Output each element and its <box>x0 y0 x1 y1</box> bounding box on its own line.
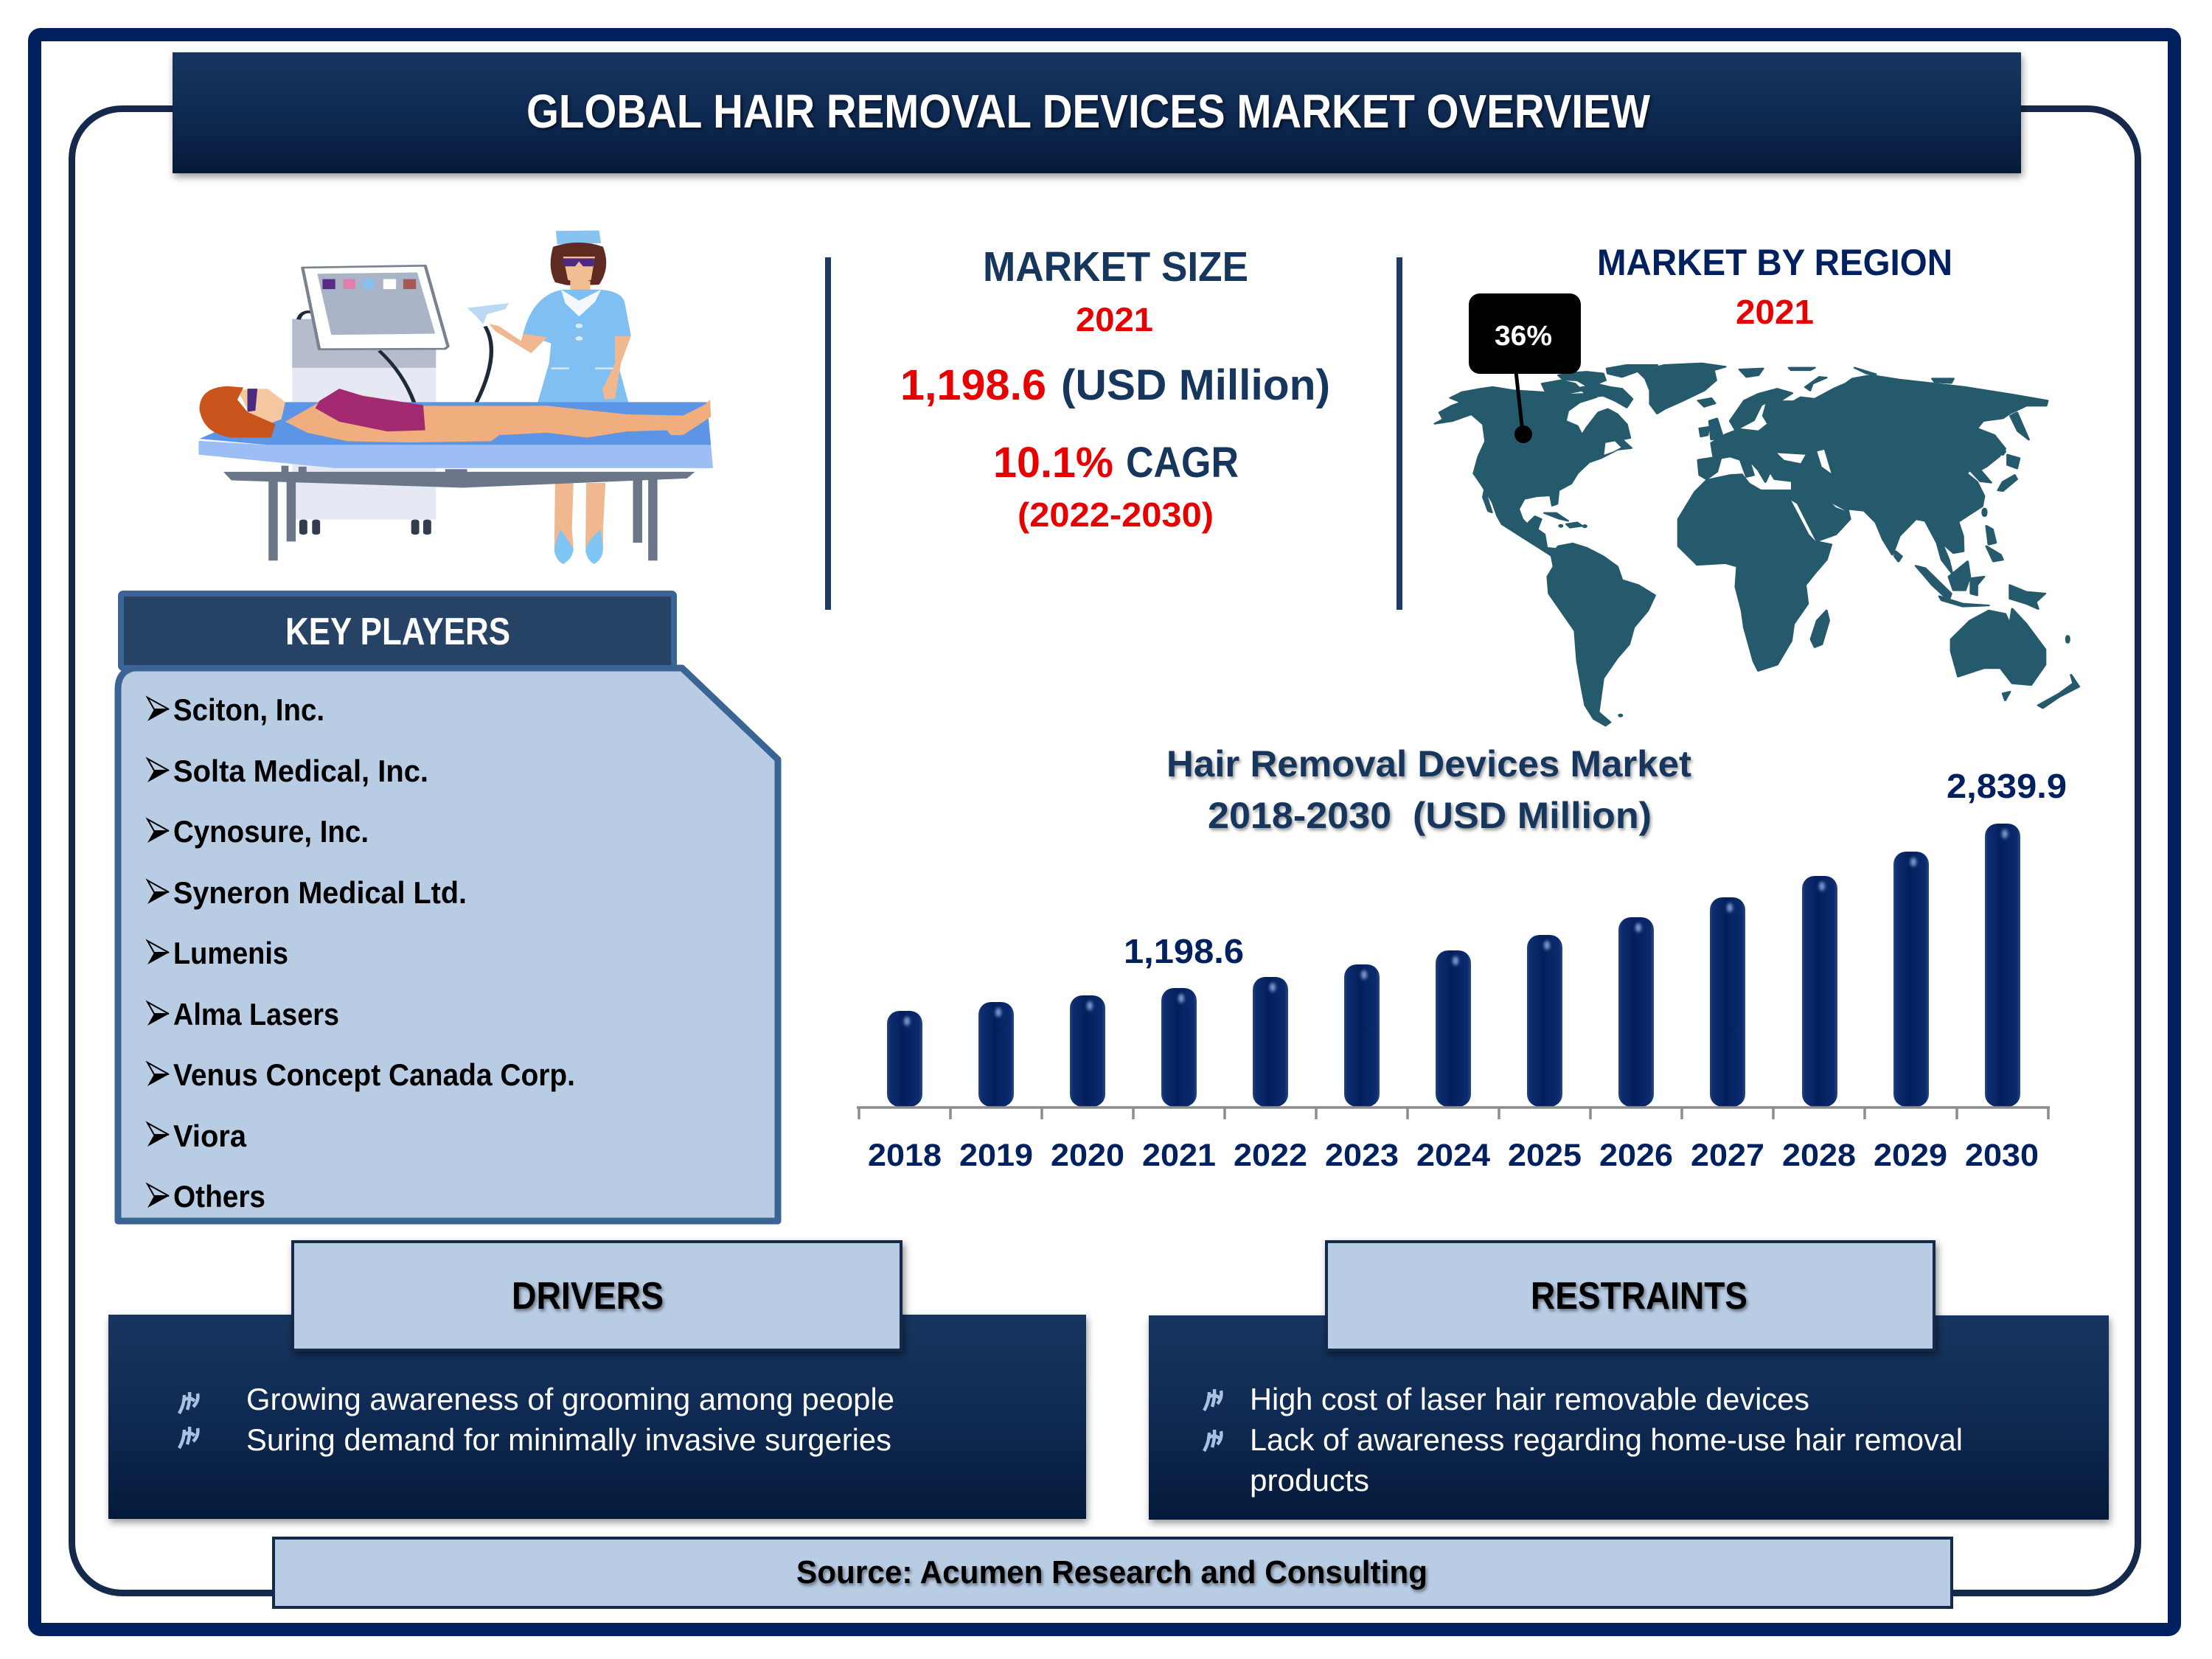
callout: North America share: 36% <box>1495 321 1552 352</box>
drivers text 2: Suring demand for minimally invasive surgeries <box>246 1422 891 1457</box>
drivers bullet 2 <box>179 1427 198 1448</box>
chart axis <box>857 1107 2050 1119</box>
market size unit: (USD Million) <box>1061 361 1330 409</box>
key players list: Others <box>173 1179 265 1214</box>
key players list: Solta Medical, Inc. <box>173 754 428 788</box>
market size year: 2021 <box>1076 301 1153 338</box>
restraints body <box>1149 1315 2109 1520</box>
panel: restraints <box>1149 1242 2109 1520</box>
key players list: Lumenis <box>173 936 288 970</box>
restraints text 2: Lack of awareness regarding home-use hair removal <box>1250 1422 1963 1457</box>
restraints tab <box>1326 1242 1934 1350</box>
restraints bullet 2 <box>1204 1430 1221 1451</box>
restraints text 1: High cost of laser hair removable devices <box>1250 1382 1809 1416</box>
key players list <box>147 692 575 1214</box>
year labels: 2024 <box>1416 1138 1490 1173</box>
treatment table and patient <box>198 386 713 560</box>
drivers bullet 1 <box>179 1392 198 1413</box>
source bar: Source: Acumen Research and Consulting <box>796 1554 1427 1590</box>
year labels: 2027 <box>1691 1138 1764 1173</box>
restraints bullet 1 <box>1204 1389 1221 1411</box>
year labels: 2028 <box>1782 1138 1856 1173</box>
panel: key players <box>118 594 778 1221</box>
chart title <box>1166 743 1691 836</box>
restraints tab: RESTRAINTS <box>1531 1275 1747 1318</box>
year labels: 2030 <box>1965 1138 2039 1173</box>
drivers text 1: Growing awareness of grooming among people <box>246 1382 894 1416</box>
year labels: 2029 <box>1874 1138 1947 1173</box>
drivers tab: DRIVERS <box>512 1275 664 1318</box>
region year: 2021 <box>1736 293 1814 331</box>
drivers body <box>108 1315 1086 1519</box>
year labels: 2018 <box>868 1138 942 1173</box>
divider: left <box>825 257 831 610</box>
market size heading: MARKET SIZE <box>983 243 1248 291</box>
region heading: MARKET BY REGION <box>1597 242 1952 283</box>
chart title: 2018-2030 (USD Million) <box>1208 795 1652 836</box>
key players list: Viora <box>173 1119 247 1153</box>
panel: drivers <box>108 1242 1086 1519</box>
market size block <box>900 243 1330 534</box>
title: GLOBAL HAIR REMOVAL DEVICES MARKET OVERVIEW <box>526 85 1651 138</box>
chart title: Hair Removal Devices Market <box>1166 743 1691 785</box>
key players list: Venus Concept Canada Corp. <box>173 1057 575 1092</box>
key players list: Syneron Medical Ltd. <box>173 875 467 910</box>
key players list: Cynosure, Inc. <box>173 814 369 849</box>
illustration: laser hair removal treatment <box>198 231 713 564</box>
year labels <box>868 1138 2039 1173</box>
year labels: 2021 <box>1142 1138 1216 1173</box>
key players list box <box>118 668 778 1221</box>
world map <box>1435 364 2079 726</box>
chart: hair removal devices market <box>857 743 2067 1173</box>
year labels: 2026 <box>1599 1138 1673 1173</box>
year labels: 2023 <box>1325 1138 1399 1173</box>
CAGR value: 10.1% <box>993 439 1113 487</box>
restraints text 2 continuation: products <box>1250 1463 1369 1498</box>
market size value: 1,198.6 <box>900 361 1046 409</box>
callout: North America share <box>1469 293 1581 443</box>
year labels: 2020 <box>1051 1138 1124 1173</box>
key players header: KEY PLAYERS <box>285 611 510 653</box>
bars <box>887 824 2020 1107</box>
key players list: Alma Lasers <box>173 997 339 1032</box>
year labels: 2022 <box>1234 1138 1307 1173</box>
year labels: 2025 <box>1508 1138 1582 1173</box>
CAGR period: (2022-2030) <box>1018 495 1214 534</box>
key players list: Sciton, Inc. <box>173 692 324 727</box>
drivers tab <box>293 1242 901 1350</box>
year labels: 2019 <box>959 1138 1033 1173</box>
market by region block <box>1435 242 2079 726</box>
value label 2021: 1,198.6 <box>1124 932 1244 970</box>
key players header <box>121 594 674 668</box>
source bar <box>274 1538 1952 1607</box>
CAGR label: CAGR <box>1126 439 1239 487</box>
title banner <box>173 52 2021 173</box>
value label 2030: 2,839.9 <box>1947 767 2067 805</box>
nurse <box>467 231 631 564</box>
divider: right <box>1397 257 1402 610</box>
